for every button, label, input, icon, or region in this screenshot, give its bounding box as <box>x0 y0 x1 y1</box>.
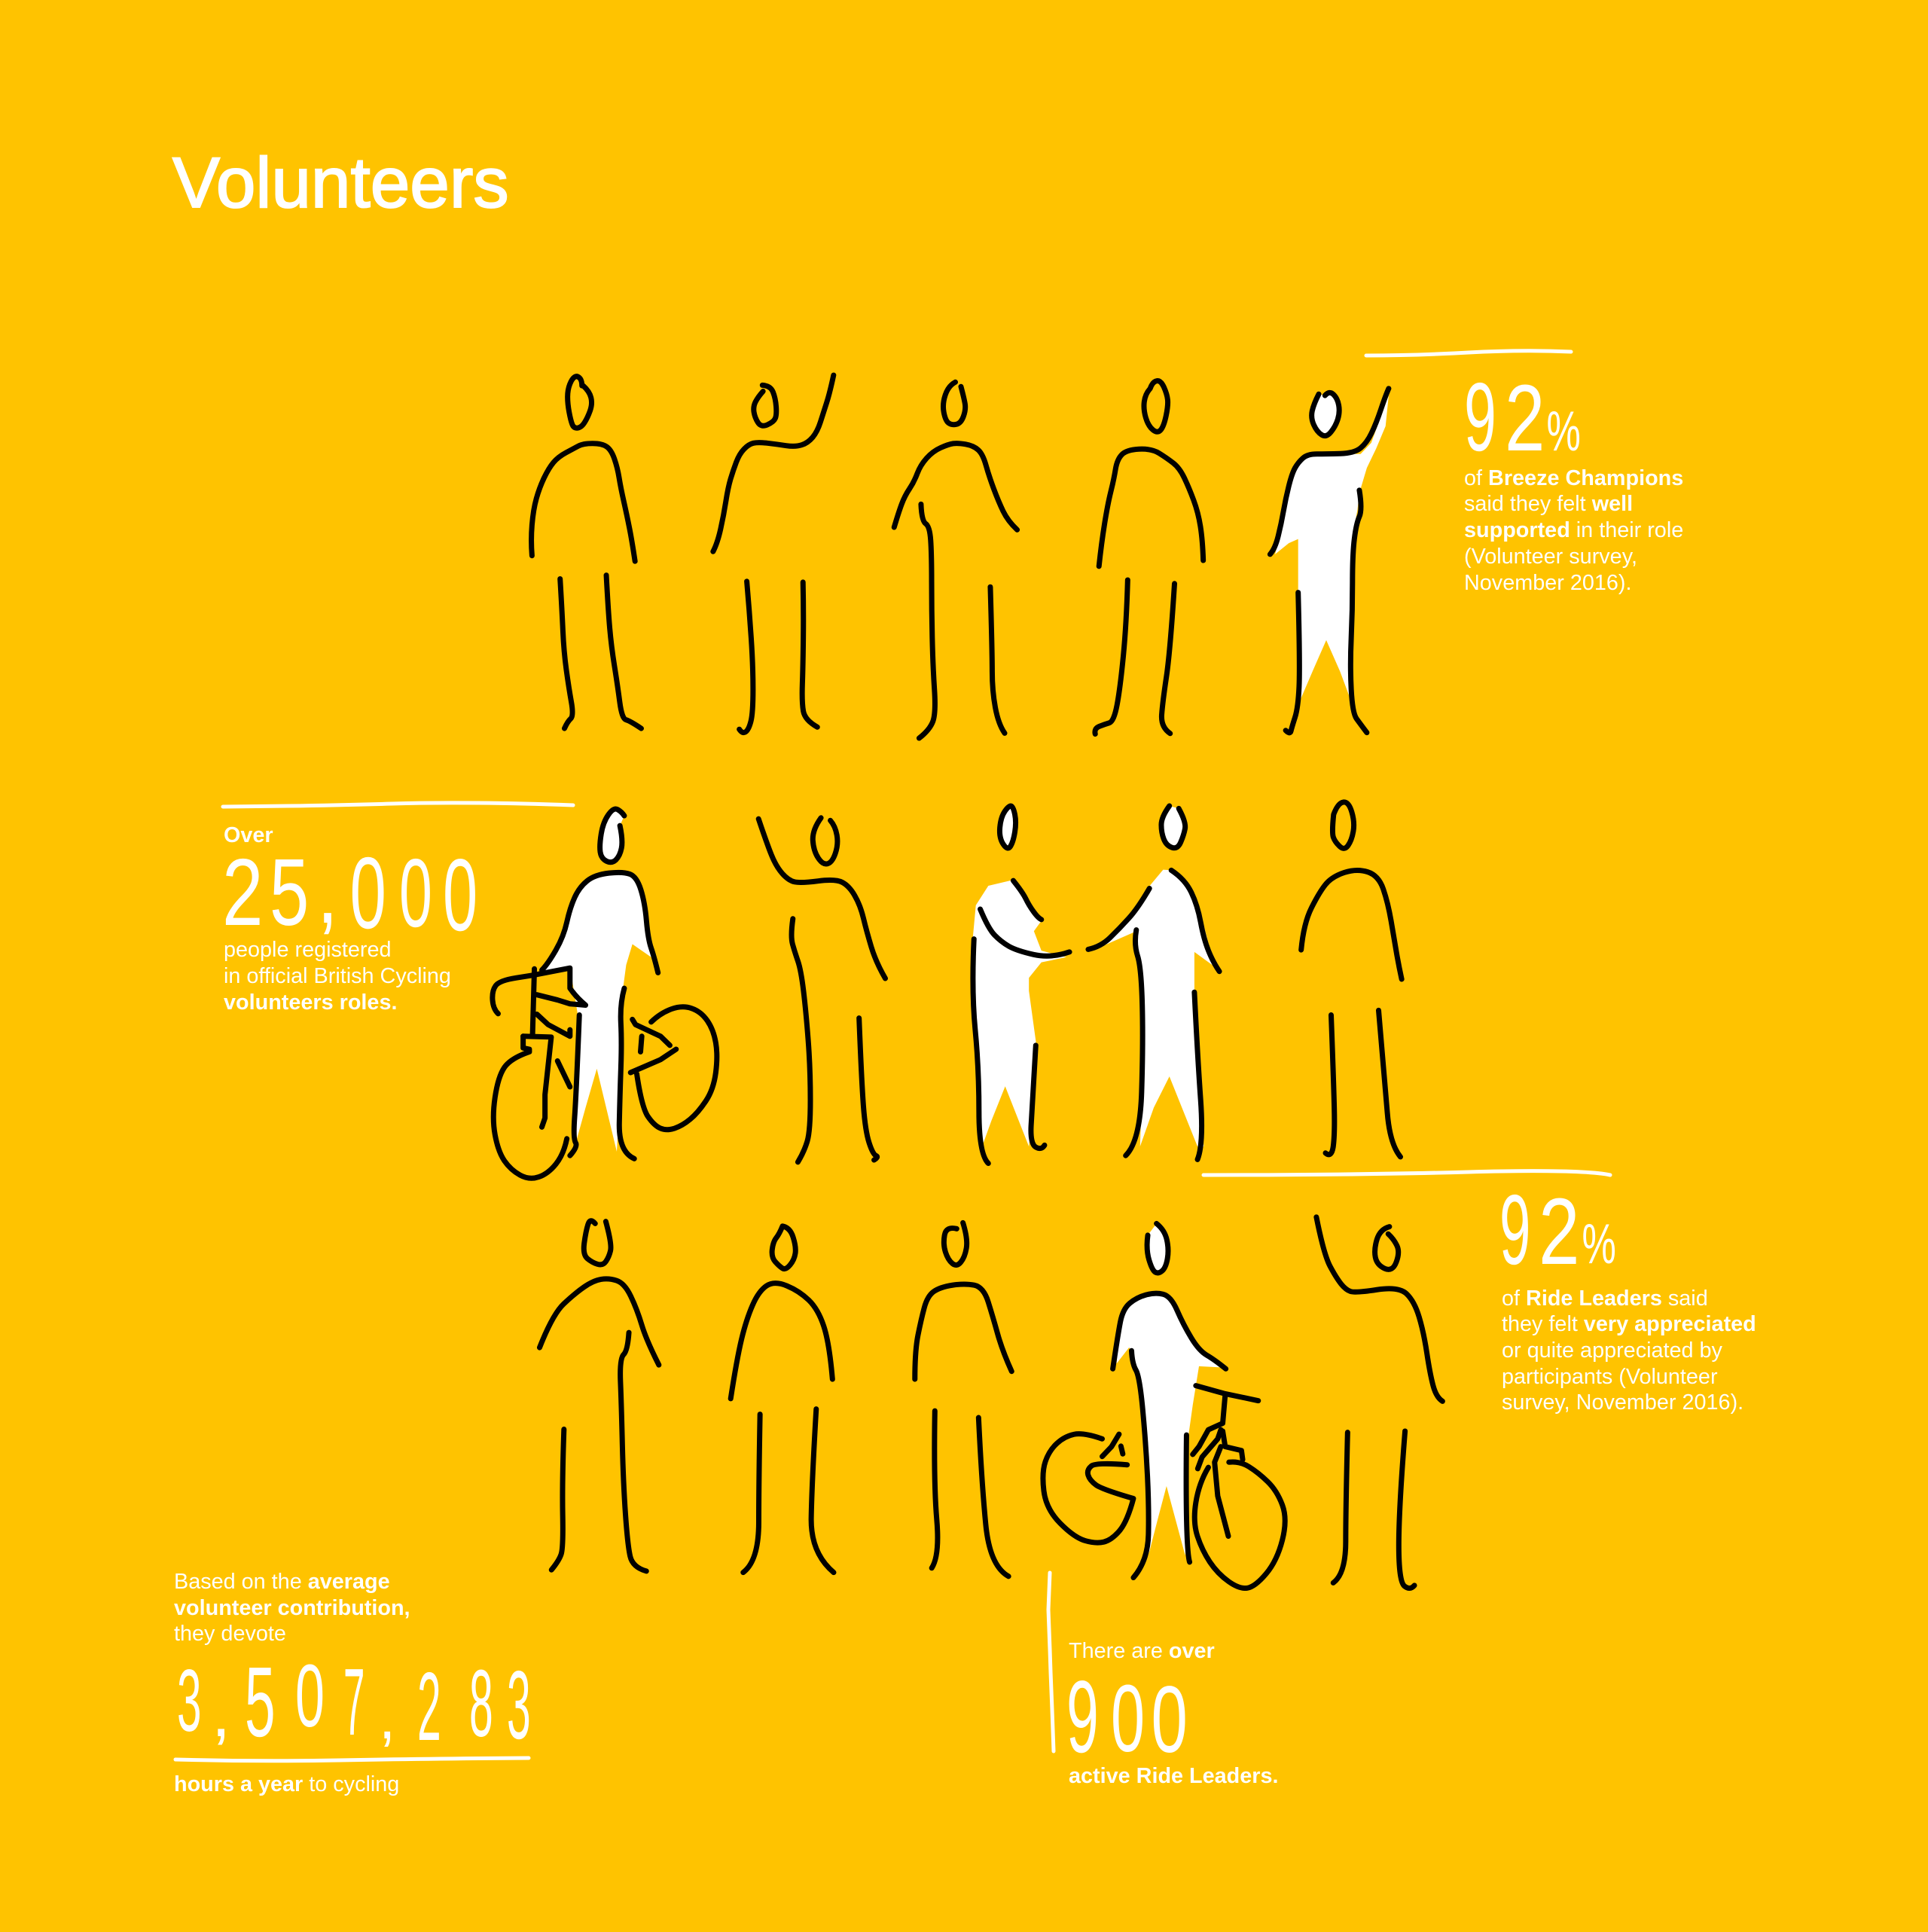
description text: volunteers roles. <box>224 990 397 1015</box>
intro text: There are over <box>1069 1639 1215 1663</box>
description text: or quite appreciated by <box>1502 1338 1723 1363</box>
big number: 92%: 2 <box>1539 1178 1580 1284</box>
big number: 3,507,283: 3 <box>507 1652 531 1760</box>
figure 3 <box>894 382 1017 738</box>
row 1 of figures <box>532 375 1389 738</box>
big number: 25,000: , <box>317 841 338 942</box>
bicycle <box>493 968 717 1178</box>
intro text: they devote <box>174 1622 286 1646</box>
big number: 900: 0 <box>1151 1667 1188 1772</box>
row 2 of figures <box>493 802 1402 1178</box>
big number: 3,507,283: 0 <box>295 1646 325 1746</box>
big number: 25,000: 2 <box>222 839 264 945</box>
big number: 3,507,283 <box>177 1646 531 1761</box>
figure 5: white highlighted, waving <box>1270 389 1389 733</box>
figure 1 <box>532 377 641 728</box>
big number: 92% <box>1499 1174 1616 1285</box>
bicycle <box>1043 1386 1285 1589</box>
description text: survey, November 2016). <box>1502 1390 1743 1415</box>
big number: 900 <box>1066 1660 1188 1775</box>
description text: of Breeze Champions <box>1464 466 1683 490</box>
big number: 3,507,283: 7 <box>343 1650 365 1756</box>
callout: over 25,000 volunteers <box>222 803 573 1015</box>
figure 12 <box>731 1226 834 1573</box>
big number: 3,507,283: 5 <box>245 1646 276 1757</box>
big number: 25,000: 0 <box>443 838 477 952</box>
figure 11 <box>539 1221 659 1571</box>
description text: of Ride Leaders said <box>1502 1286 1708 1311</box>
big number: 3,507,283: 2 <box>417 1653 441 1761</box>
figure 8: white highlighted, shaking hands <box>972 806 1069 1164</box>
label: Over: Over <box>224 823 273 847</box>
big number: 3,507,283: 8 <box>469 1650 493 1757</box>
big number: 25,000: 5 <box>270 839 309 945</box>
callout: hours a year <box>174 1570 531 1796</box>
intro text <box>174 1570 410 1646</box>
figure 6: white highlighted with bicycle <box>493 809 717 1178</box>
big number: 900: 9 <box>1066 1660 1099 1775</box>
description text <box>1464 466 1683 595</box>
title: Volunteers <box>172 143 509 223</box>
description text <box>224 938 451 1015</box>
big number: 25,000 <box>222 837 477 952</box>
big number: 25,000: 0 <box>349 837 386 951</box>
figure 7: waving <box>758 818 885 1162</box>
description text: they felt very appreciated <box>1502 1312 1756 1336</box>
description text: said they felt well <box>1464 492 1633 516</box>
figure 13 <box>915 1222 1011 1576</box>
description text: in official British Cycling <box>224 964 451 988</box>
callout: over 900 ride leaders <box>1048 1573 1279 1788</box>
figure 15: waving <box>1316 1217 1442 1589</box>
closing text: hours a year to cycling <box>174 1772 399 1796</box>
description text: participants (Volunteer <box>1502 1365 1718 1389</box>
description text <box>1502 1286 1756 1415</box>
row 3 of figures <box>539 1217 1442 1589</box>
figure 2: waving <box>713 375 834 733</box>
callout: 92% of Ride Leaders <box>1203 1171 1756 1415</box>
intro text: Based on the average <box>174 1570 390 1594</box>
figure 10 <box>1301 802 1402 1157</box>
big number: 92% <box>1464 362 1581 472</box>
description text: supported in their role <box>1464 518 1683 542</box>
big number: 92%: % <box>1547 399 1581 462</box>
big number: 3,507,283: , <box>379 1681 395 1753</box>
description text: (Volunteer survey, <box>1464 545 1637 569</box>
big number: 92%: 2 <box>1505 365 1545 471</box>
description text: people registered <box>224 938 392 962</box>
big number: 92%: 9 <box>1499 1174 1530 1285</box>
big number: 3,507,283: , <box>212 1676 230 1751</box>
big number: 3,507,283: 3 <box>177 1651 202 1750</box>
callout: 92% of Breeze Champions <box>1366 351 1683 595</box>
figure 4 <box>1095 381 1203 734</box>
description text: November 2016). <box>1464 571 1631 595</box>
big number: 92%: 9 <box>1464 362 1496 472</box>
intro text: volunteer contribution, <box>174 1596 410 1620</box>
figure 14: white highlighted with bicycle <box>1043 1223 1285 1589</box>
big number: 900: 0 <box>1111 1666 1145 1772</box>
figure 9: white highlighted, shaking hands <box>1088 806 1219 1159</box>
closing text: active Ride Leaders. <box>1069 1764 1279 1788</box>
big number: 92%: % <box>1582 1212 1616 1275</box>
big number: 25,000: 0 <box>399 838 432 948</box>
